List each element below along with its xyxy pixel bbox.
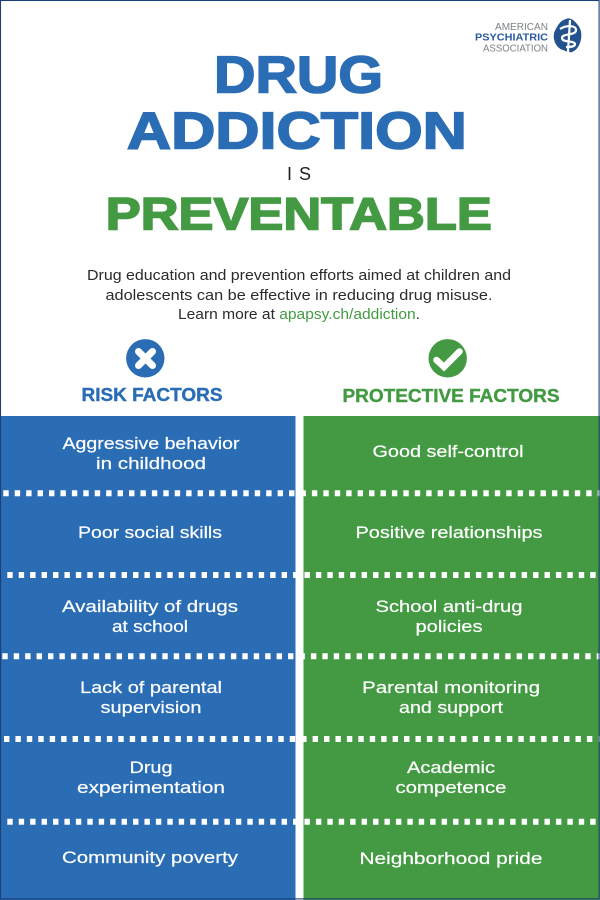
logo: American Psychiatric Association: ASSOCIATION — [483, 44, 548, 55]
title: IS — [287, 164, 311, 184]
panel: risk factors — [0, 416, 296, 900]
protective: school anti-drug policies — [376, 598, 522, 636]
risk: availability of drugs: Availability of drugs — [62, 598, 238, 616]
panel: protective factors — [304, 416, 600, 900]
risk: availability of drugs: at school — [112, 618, 188, 636]
intro text: Learn more at apapsy.ch/addiction . — [178, 307, 420, 323]
risk: drug experimentation: experimentation — [77, 779, 225, 797]
heading: protective factors: PROTECTIVE FACTORS — [342, 386, 560, 406]
logo: American Psychiatric Association — [475, 18, 581, 55]
title: DRUG — [214, 46, 383, 104]
risk: aggressive behavior: in childhood — [96, 455, 206, 473]
protective: school anti-drug policies: policies — [416, 618, 482, 636]
risk: lack of parental supervision: Lack of parental — [80, 679, 222, 697]
logo: American Psychiatric Association: PSYCHIATRIC — [475, 32, 548, 44]
protective: parental monitoring: and support — [399, 699, 503, 717]
heading: risk factors: RISK FACTORS — [82, 385, 222, 405]
intro text — [87, 268, 511, 323]
risk: aggressive behavior — [62, 435, 240, 473]
title: PREVENTABLE — [106, 188, 492, 239]
protective: academic competence — [396, 759, 506, 797]
risk: community poverty: Community poverty — [62, 849, 239, 867]
protective: positive relationships: Positive relationships — [356, 524, 542, 542]
intro text: adolescents can be effective in reducing drug misuse. — [106, 288, 492, 304]
risk: drug experimentation — [77, 759, 225, 797]
protective: good self-control: Good self-control — [372, 443, 524, 461]
risk: lack of parental supervision — [80, 679, 222, 717]
risk: drug experimentation: Drug — [130, 759, 172, 777]
risk: poor social skills: Poor social skills — [78, 524, 222, 542]
protective: school anti-drug policies: School anti-drug — [376, 598, 522, 616]
title: ADDICTION — [127, 102, 467, 160]
protective: neighborhood pride: Neighborhood pride — [360, 850, 542, 868]
protective: parental monitoring — [362, 679, 540, 717]
intro text: Drug education and prevention efforts aimed at children and — [87, 268, 511, 284]
risk: lack of parental supervision: supervision — [100, 699, 202, 717]
protective: parental monitoring: Parental monitoring — [362, 679, 540, 697]
protective: academic competence: competence — [396, 779, 506, 797]
title — [106, 46, 492, 239]
protective: academic competence: Academic — [407, 759, 495, 777]
logo: American Psychiatric Association: AMERICAN — [495, 22, 548, 33]
icon: protective check — [428, 339, 467, 377]
risk: aggressive behavior: Aggressive behavior — [62, 435, 240, 453]
risk: availability of drugs — [62, 598, 238, 636]
icon: risk cross — [126, 339, 164, 377]
